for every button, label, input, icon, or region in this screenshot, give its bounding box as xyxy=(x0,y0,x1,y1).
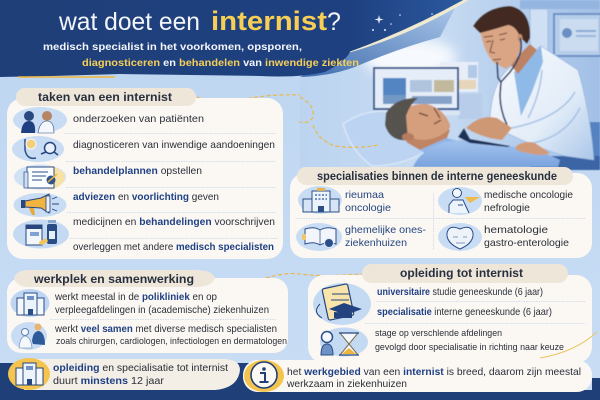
spec 6 text: ziekenhuizen xyxy=(345,237,407,249)
task 1 text: onderzoeken van patiënten xyxy=(73,113,204,125)
patient neck and head xyxy=(385,98,450,150)
doctor neck xyxy=(510,44,537,74)
stethoscope xyxy=(497,38,521,125)
doctor hair xyxy=(473,6,530,44)
icon: info circle xyxy=(244,360,284,392)
header lower highlight xyxy=(18,76,115,78)
work 4 text: zoals chirurgen, cardiologen, infectiologen en dermatologen xyxy=(56,336,287,347)
patient blanket xyxy=(413,139,560,167)
star sparkles xyxy=(372,13,433,31)
spec 4 text: nefrologie xyxy=(484,202,530,214)
title: ? xyxy=(327,8,341,36)
work 1 text: werkt meestal in de polikliniek en op xyxy=(54,291,217,303)
wall shelf xyxy=(440,62,482,119)
doctor ear xyxy=(518,34,522,42)
panel: werkplek en samenwerking xyxy=(7,270,288,353)
doctor coat xyxy=(490,46,594,160)
task 4 icon: megaphone xyxy=(14,193,66,217)
subtitle line 1: medisch specialist in het voorkomen, opsporen, xyxy=(43,41,302,53)
icon: hospital on yellow xyxy=(8,358,50,390)
task 2 icon: stethoscope and magnifier xyxy=(12,136,64,162)
doctor second hand xyxy=(516,142,550,155)
title: internist xyxy=(211,6,327,36)
coat sleeve shadow xyxy=(512,70,580,144)
spec 2 text: oncologie xyxy=(345,202,391,214)
panel: opleiding tot internist xyxy=(308,264,592,363)
subtitle line 2: diagnosticeren en behandelen van inwendige ziekten xyxy=(82,57,359,69)
wall cabinet xyxy=(530,9,548,54)
heading pill xyxy=(362,264,568,283)
icon: hospital building xyxy=(298,186,342,214)
spec 8 text: gastro-enterologie xyxy=(484,237,569,249)
callout text line 1: het werkgebied van een internist is breed, daarom zijn meestal xyxy=(287,366,581,378)
doctor hand xyxy=(466,117,512,140)
icon: heart with face xyxy=(438,223,482,251)
heading pill xyxy=(14,270,215,287)
callout text line 2: werkzaam in ziekenhuizen xyxy=(286,378,407,390)
panel: specialisaties binnen de interne geneeskunde xyxy=(290,167,592,258)
work 2 text: verpleegafdelingen in (academische) ziekenhuizen xyxy=(55,304,269,316)
hospital room wall xyxy=(300,0,600,170)
dashed connector: top xyxy=(197,95,379,147)
callout: werkgebied xyxy=(243,360,592,392)
header lower mid-blue wedge xyxy=(300,8,455,77)
heading: werkplek en samenwerking xyxy=(33,272,194,286)
bed base xyxy=(530,156,600,170)
bottom band fill xyxy=(0,363,250,400)
edu 3 text: stage op verschlende afdelingen xyxy=(375,328,502,339)
dashed connector: middle xyxy=(215,274,362,283)
task 4 text: adviezen en voorlichting geven xyxy=(73,191,219,203)
callout text line 1: opleiding en specialisatie tot internist xyxy=(53,362,228,374)
spec 5 text: ghemelijke ones- xyxy=(345,224,426,236)
task 2 text: diagnosticeren van inwendige aandoeningen xyxy=(73,139,275,151)
white header swoosh xyxy=(350,0,468,52)
computer monitor xyxy=(374,68,460,115)
icon: hospital xyxy=(10,289,50,317)
wall panel at right xyxy=(582,122,600,170)
doctor face features xyxy=(484,33,507,60)
icon: colleagues xyxy=(11,322,47,350)
icon: open book xyxy=(296,223,342,251)
heading pill xyxy=(16,88,196,106)
task 5 text: medicijnen en behandelingen voorschrijven xyxy=(73,216,275,228)
task 3 text: behandelplannen opstellen xyxy=(73,165,202,177)
pillow xyxy=(343,111,425,166)
hero illustration: doctor examining patient xyxy=(300,0,600,170)
heading pill xyxy=(297,167,573,185)
task 3 icon: treatment plan xyxy=(14,164,66,190)
framed certificate xyxy=(554,14,600,56)
heading: taken van een internist xyxy=(38,90,172,104)
panel: taken van een internist xyxy=(7,88,283,259)
heading: specialisaties binnen de interne geneeskunde xyxy=(317,169,557,183)
callout text line 2: duurt minstens 12 jaar xyxy=(53,375,165,387)
patient shirt collar xyxy=(420,138,462,156)
icon: patient figure xyxy=(438,187,482,215)
upper wall band xyxy=(520,0,600,9)
top navy header band xyxy=(0,0,466,77)
title xyxy=(58,6,341,36)
task 1 icon: doctor and patient xyxy=(13,107,67,133)
bottom navy band xyxy=(0,378,600,400)
task 5 icon: medication xyxy=(13,220,69,248)
task 6 text: overleggen met andere medisch specialisten xyxy=(73,241,274,253)
doctor shirt xyxy=(514,46,543,116)
bottom-right accent curve xyxy=(540,332,597,358)
edu 4 text: gevolgd door specialisatie in richting naar keuze xyxy=(375,342,564,353)
spec 7 text: hematologie xyxy=(484,224,548,236)
doctor face xyxy=(480,22,521,69)
edu 1 text: universitaire studie geneeskunde (6 jaar) xyxy=(377,286,543,298)
callout: opleiding duurt minstens 12 jaar xyxy=(8,358,240,390)
spec 1 text: rieumaa xyxy=(345,189,384,201)
window light xyxy=(364,38,456,78)
heading: opleiding tot internist xyxy=(400,266,523,280)
work 3 text: werkt veel samen met diverse medisch specialisten xyxy=(54,323,277,335)
spec 3 text: medische oncologie xyxy=(484,189,573,201)
icon: person and hourglass xyxy=(320,328,368,356)
title: wat doet een xyxy=(58,8,200,36)
chest piece xyxy=(458,128,510,147)
icon: diploma and cap xyxy=(313,283,371,325)
edu 2 text: specialisatie interne geneeskunde (6 jaar) xyxy=(377,306,552,318)
